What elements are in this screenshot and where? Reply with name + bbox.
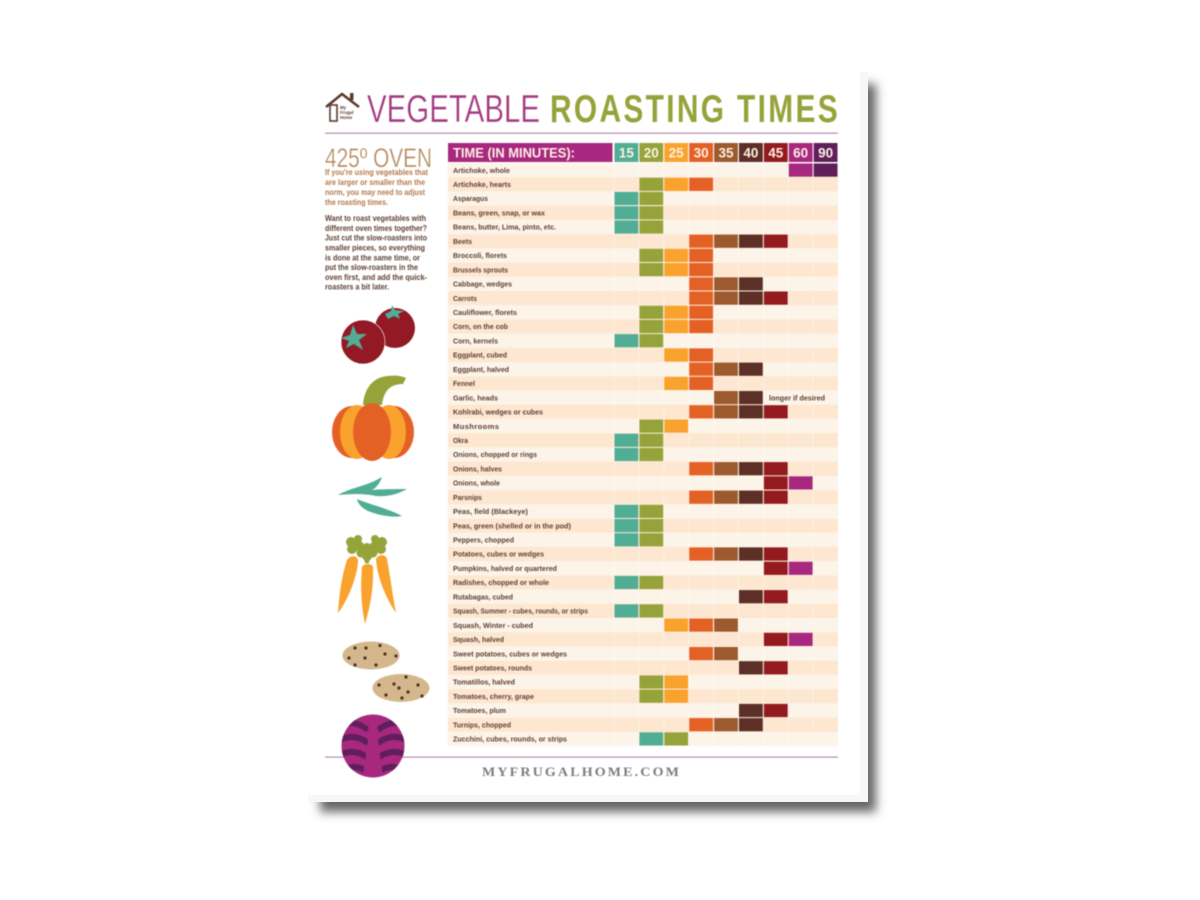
oven temperature heading: 425º OVEN [325, 143, 432, 173]
row: Fennel: Fennel [453, 379, 475, 388]
row: Okra [453, 434, 663, 447]
title [367, 88, 840, 131]
row: Asparagus [453, 192, 663, 205]
row: Onions, whole: Onions, whole [453, 479, 500, 488]
header time columns: 90 [818, 146, 833, 160]
row: Artichoke, hearts: Artichoke, hearts [453, 180, 511, 189]
logo: house: Frugal [340, 110, 353, 115]
icon: carrots [338, 535, 396, 624]
header time columns: 40 [743, 146, 758, 160]
row: Beans, green, snap, or wax: Beans, green, snap, or wax [453, 208, 546, 218]
row: Peas, green (shelled or in the pod) [453, 519, 663, 532]
note: size adjustment: norm, you may need to adjust [325, 188, 425, 197]
row: Corn, on the cob [453, 320, 713, 333]
row: Peas, field (Blackeye) [453, 505, 663, 518]
paper sheet [308, 72, 868, 802]
row: Onions, whole [453, 476, 813, 490]
header time columns: 20 [644, 146, 659, 160]
note: mixed roasting: put the slow-roasters in the [325, 263, 418, 272]
note: mixed roasting: smaller pieces, so everything [325, 244, 425, 252]
row: Cauliflower, florets: Cauliflower, florets [453, 308, 517, 317]
bottom rule [325, 756, 838, 758]
row: Beans, green, snap, or wax [453, 206, 663, 219]
row: Sweet potatoes, rounds: Sweet potatoes, rounds [453, 664, 532, 672]
title: ROASTING TIMES [550, 88, 840, 131]
row: Onions, halves [453, 462, 788, 475]
note: mixed roasting: different oven times together? [325, 224, 427, 233]
row: Brussels sprouts [453, 263, 713, 276]
row: Tomatillos, halved [453, 675, 688, 689]
row: Eggplant, halved: Eggplant, halved [453, 365, 509, 374]
note: mixed roasting: is done at the same time, or [325, 254, 420, 262]
row: Sweet potatoes, cubes or wedges [453, 647, 738, 660]
row: Zucchini, cubes, rounds, or strips [453, 732, 688, 746]
row: Eggplant, cubed: Eggplant, cubed [453, 351, 507, 360]
row: Tomatoes, cherry, grape [453, 690, 688, 703]
row: Okra: Okra [453, 436, 469, 445]
row: Squash, Summer [453, 604, 663, 618]
row: Kohlrabi, wedges or cubes [453, 405, 788, 418]
row: Squash, halved: Squash, halved [453, 635, 504, 644]
row: Radishes, chopped or whole: Radishes, chopped or whole [453, 578, 549, 587]
row: Pumpkins, halved or quartered: Pumpkins, halved or quartered [453, 564, 557, 573]
row: Squash, Winter: Squash, Winter - cubed [453, 621, 533, 630]
row: Artichoke, whole [453, 164, 838, 177]
top rule [325, 133, 838, 134]
row: Onions, chopped or rings [453, 448, 663, 461]
header time columns: 60 [793, 146, 808, 160]
footer: website: MYFRUGALHOME.COM [482, 764, 681, 779]
header label: TIME (IN MINUTES): [453, 146, 575, 160]
row: Squash, Summer: Squash, Summer - cubes, rounds, or strips [453, 607, 588, 616]
note: size adjustment: are larger or smaller than the [325, 178, 425, 187]
row: Garlic, heads: Garlic, heads [453, 393, 498, 402]
row: Radishes, chopped or whole [453, 576, 663, 589]
row: Parsnips: Parsnips [453, 493, 482, 502]
row: Turnips, chopped: Turnips, chopped [453, 720, 511, 729]
row: Corn, on the cob: Corn, on the cob [453, 322, 508, 331]
logo: house [326, 93, 359, 121]
row: Onions, chopped or rings: Onions, chopped or rings [453, 450, 537, 459]
logo: house: My [340, 105, 347, 110]
row: Carrots [453, 292, 788, 305]
row: Mushrooms [453, 420, 688, 433]
row: Sweet potatoes, cubes or wedges: Sweet potatoes, cubes or wedges [453, 649, 567, 658]
row: Artichoke, hearts [453, 178, 713, 191]
row: Broccoli, florets: Broccoli, florets [453, 251, 507, 260]
row: Potatoes, cubes or wedges: Potatoes, cubes or wedges [453, 550, 544, 559]
header time columns: 30 [694, 146, 709, 160]
row: Mushrooms: Mushrooms [453, 422, 499, 431]
row: Peppers, chopped: Peppers, chopped [453, 536, 514, 544]
row: Peas, green (shelled or in the pod): Peas, green (shelled or in the pod) [453, 521, 571, 530]
row: Beets [453, 235, 788, 248]
logo: house: Home [340, 115, 353, 120]
icon: red cabbage [338, 714, 408, 778]
chart header [448, 143, 838, 162]
row: Tomatoes, plum: Tomatoes, plum [453, 706, 506, 715]
header time columns: 25 [669, 146, 684, 160]
row: Tomatoes, plum [453, 704, 788, 717]
row: Parsnips [453, 491, 788, 504]
note: size adjustment: the roasting times. [325, 198, 388, 207]
row: Corn, kernels [453, 334, 663, 347]
row: Tomatillos, halved: Tomatillos, halved [453, 678, 515, 687]
chart row bands [448, 163, 838, 746]
row: Rutabagas, cubed: Rutabagas, cubed [453, 592, 513, 601]
header label [448, 143, 612, 162]
note: mixed roasting: roasters a bit later. [325, 282, 389, 292]
row: Garlic, heads: longer if desired [769, 393, 825, 402]
row: Corn, kernels: Corn, kernels [453, 336, 498, 345]
row: Fennel [453, 377, 713, 390]
row: Garlic, heads [453, 391, 825, 404]
icon: potatoes [342, 642, 430, 702]
row: Kohlrabi, wedges or cubes: Kohlrabi, wedges or cubes [453, 408, 543, 416]
row: Brussels sprouts: Brussels sprouts [453, 265, 508, 274]
row: Peas, field (Blackeye): Peas, field (Blackeye) [453, 507, 528, 516]
icon: green beans [338, 477, 407, 517]
row: Zucchini, cubes, rounds, or strips: Zucchini, cubes, rounds, or strips [453, 735, 567, 744]
row: Squash, halved [453, 633, 813, 646]
row: Pumpkins, halved or quartered [453, 562, 813, 575]
note: mixed roasting: Want to roast vegetables with [325, 214, 426, 223]
row: Artichoke, whole: Artichoke, whole [453, 166, 510, 175]
header time columns [614, 143, 838, 162]
header time columns: 15 [619, 146, 634, 160]
row: Eggplant, halved [453, 363, 763, 376]
note: size adjustment: If you're using vegetables that [325, 168, 428, 177]
note: size adjustment [325, 168, 428, 207]
row: Peppers, chopped [453, 533, 663, 546]
note: mixed roasting: oven first, and add the quick- [325, 273, 427, 282]
row: Tomatoes, cherry, grape: Tomatoes, cherry, grape [453, 692, 534, 701]
row: Beets: Beets [453, 237, 472, 246]
row: Rutabagas, cubed [453, 590, 788, 603]
row: Squash, Winter [453, 618, 738, 632]
row: Asparagus: Asparagus [453, 194, 488, 203]
row: Sweet potatoes, rounds [453, 661, 788, 674]
row: Broccoli, florets [453, 249, 713, 262]
paper drop shadow [320, 84, 876, 812]
row: Beans, butter, Lima, pinto, etc. [453, 220, 663, 234]
row: Turnips, chopped [453, 718, 763, 731]
icon: tomatoes [341, 305, 415, 364]
row: Beans, butter, Lima, pinto, etc.: Beans, butter, Lima, pinto, etc. [453, 223, 556, 232]
icon: pumpkin [332, 376, 414, 461]
title: VEGETABLE [367, 88, 540, 131]
note: mixed roasting: Just cut the slow-roasters into [325, 234, 427, 242]
note: mixed roasting [325, 214, 427, 292]
row: Potatoes, cubes or wedges [453, 547, 788, 561]
row: Carrots: Carrots [453, 294, 477, 303]
row: Onions, halves: Onions, halves [453, 464, 502, 473]
row: Eggplant, cubed [453, 348, 713, 362]
header time columns: 45 [768, 146, 784, 160]
row: Cabbage, wedges [453, 277, 763, 290]
row: Cauliflower, florets [453, 306, 713, 319]
header time columns: 35 [718, 146, 734, 160]
row: Cabbage, wedges: Cabbage, wedges [453, 280, 512, 289]
